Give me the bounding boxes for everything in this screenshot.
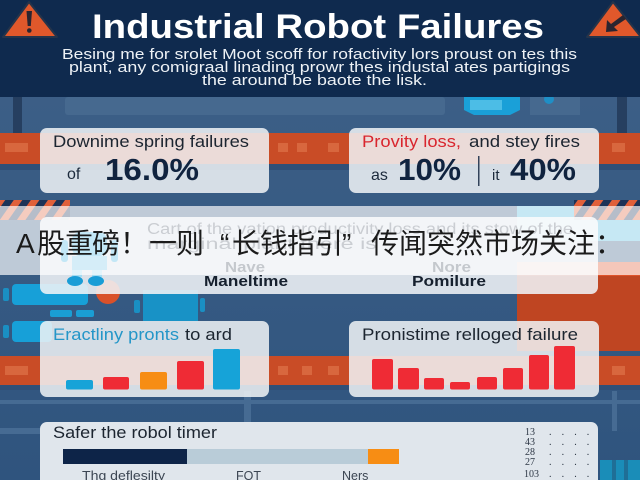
label: failure: Pomilure: [412, 273, 486, 290]
panel: productivity loss: it: [492, 167, 500, 184]
comparison text: marginal plant there is: [147, 236, 377, 253]
chart heading: [53, 326, 232, 344]
label: downtime: Maneltime: [204, 273, 288, 290]
data table: 13: [525, 427, 535, 438]
data table: [524, 427, 593, 480]
chart heading: to ard: [185, 326, 232, 344]
subtitle: Besing me for srolet Moot scoff for rofactivity lors proust on tes this: [62, 47, 577, 63]
panel: productivity loss: and stey fires: [469, 133, 580, 151]
data table: . . . .: [549, 469, 593, 480]
bar chart: [372, 346, 575, 390]
subtitle: the around be baote the lisk.: [202, 73, 427, 89]
data table: . . . .: [549, 427, 593, 438]
label: failure: [412, 259, 486, 290]
title: Industrial Robot Failures: [92, 8, 544, 46]
hazard stripes right: [574, 200, 640, 220]
chart heading: Eractliny pronts: [53, 326, 179, 344]
subtitle: plant, any comigraal linading prowr thes industal ates partigings: [69, 60, 570, 76]
panel: productivity loss: 10%: [398, 152, 461, 187]
panel: bar chart right: [349, 321, 599, 397]
headline overlay text: A股重磅！一则“长钱指引”传闻突然市场关注：: [16, 228, 623, 259]
headline overlay band: [0, 206, 640, 275]
hazard stripes left: [0, 200, 70, 220]
panel: downtime: 16.0%: [105, 152, 199, 187]
data table: 103: [524, 469, 539, 480]
subtitle: [62, 47, 577, 89]
label: downtime: [204, 259, 288, 290]
panel: timer: [40, 422, 598, 480]
panel: downtime: Downime spring failures: [53, 133, 249, 151]
header band: [0, 0, 640, 97]
comparison text: Cart of the vation productivity loss and its stow of the: [147, 221, 573, 238]
panel: downtime: of: [67, 166, 81, 183]
label: failure: Nore: [432, 259, 471, 276]
panel: productivity loss: as: [371, 167, 388, 184]
label: downtime: Nave: [225, 259, 265, 276]
stacked bar: [63, 449, 399, 464]
machine: blue cylinders: [3, 280, 205, 342]
panel: comparison with robot: [40, 217, 598, 294]
data table: 43: [525, 437, 535, 448]
machine: upper blue unit: [464, 94, 554, 115]
panel: productivity loss: [349, 128, 599, 193]
icon: warning triangle right: [587, 2, 640, 37]
data table: . . . .: [549, 437, 593, 448]
data table: 27: [525, 457, 535, 468]
panel: productivity loss: Provity loss,: [362, 133, 461, 151]
data table: . . . .: [549, 457, 593, 468]
data table: 28: [525, 447, 535, 458]
stacked bar labels: [82, 469, 368, 480]
panel: bar chart left: [40, 321, 269, 397]
icon: warning triangle left: [3, 2, 57, 37]
chart heading: Pronistime relloged failure: [362, 326, 578, 344]
bar chart: [66, 349, 240, 390]
timer heading: Safer the robol timer: [53, 424, 218, 442]
icon: robot: [61, 232, 118, 286]
panel: downtime: [40, 128, 269, 193]
panel: productivity loss: 40%: [510, 152, 576, 187]
data table: . . . .: [549, 447, 593, 458]
comparison text: [147, 221, 573, 253]
machine: bottom right: [600, 460, 640, 480]
